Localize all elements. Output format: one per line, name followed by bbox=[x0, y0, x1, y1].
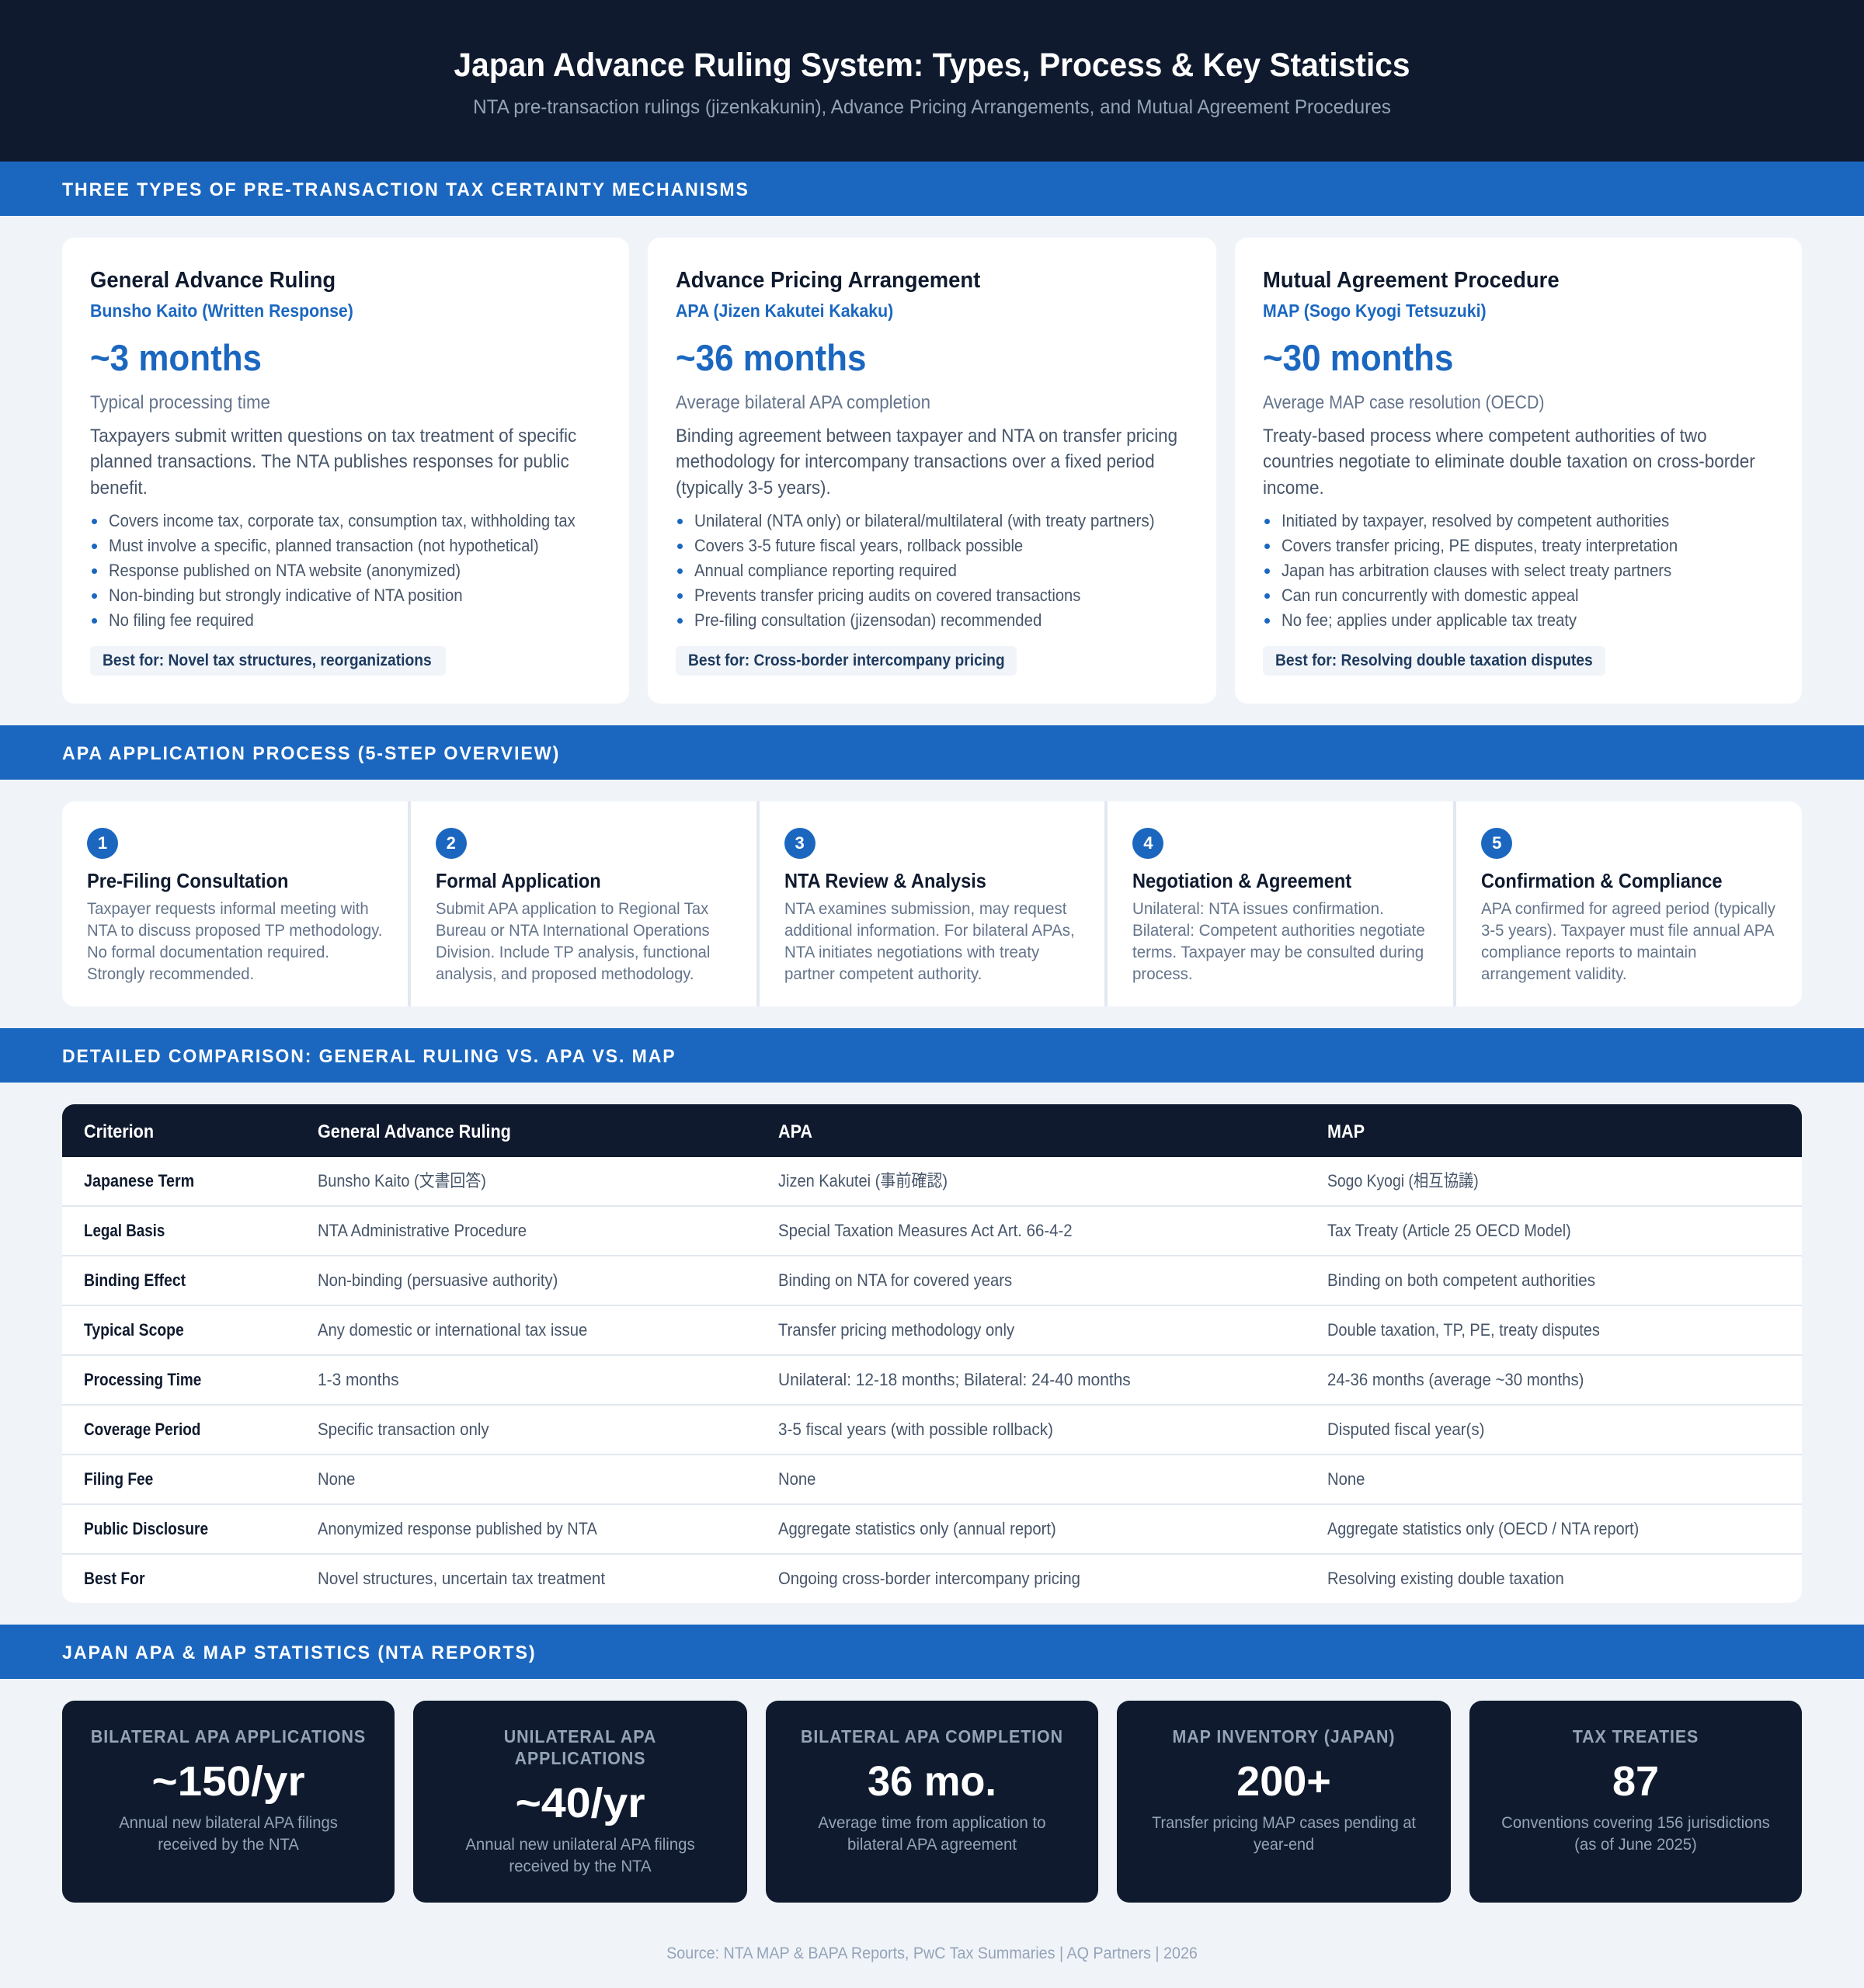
stat note: year-end bbox=[1254, 1835, 1314, 1854]
step description: additional information. For bilateral APAs, bbox=[784, 921, 1074, 940]
stat note bbox=[465, 1835, 695, 1875]
description: (typically 3-5 years). bbox=[676, 478, 831, 499]
section heading: statistics bbox=[0, 1625, 1864, 1679]
row: public disclosure: Aggregate statistics only (OECD / NTA report) bbox=[1327, 1519, 1639, 1538]
stat value: 87 bbox=[1612, 1758, 1659, 1805]
row: filing fee: None bbox=[778, 1469, 816, 1489]
row: processing time: Processing Time bbox=[84, 1370, 201, 1389]
row: legal basis: Tax Treaty (Article 25 OECD Model) bbox=[1327, 1221, 1571, 1240]
step number: 5 bbox=[1492, 833, 1501, 853]
bullet list: Covers 3-5 future fiscal years, rollback possible bbox=[694, 536, 1023, 555]
step description: APA confirmed for agreed period (typically bbox=[1481, 899, 1775, 918]
row: legal basis: Legal Basis bbox=[84, 1221, 165, 1240]
row: coverage period: Disputed fiscal year(s) bbox=[1327, 1420, 1484, 1439]
row: binding effect: Non-binding (persuasive authority) bbox=[318, 1270, 558, 1290]
stat value: 200+ bbox=[1236, 1758, 1331, 1805]
bullet list: No filing fee required bbox=[109, 610, 254, 630]
stat card: tax treaties bbox=[1469, 1701, 1802, 1903]
row: filing fee bbox=[62, 1455, 1802, 1505]
stat note: Annual new bilateral APA filings bbox=[119, 1813, 338, 1832]
bullet list: Initiated by taxpayer, resolved by competent authorities bbox=[1282, 511, 1669, 530]
row: legal basis bbox=[62, 1207, 1802, 1256]
row: processing time: 24-36 months (average ~30 months) bbox=[1327, 1370, 1584, 1389]
description: income. bbox=[1263, 478, 1324, 499]
step 1 bbox=[62, 801, 408, 1006]
comparison table bbox=[62, 1104, 1802, 1603]
card subtitle: MAP (Sogo Kyogi Tetsuzuki) bbox=[1263, 301, 1487, 321]
best-for tag: Best for: Novel tax structures, reorganizations bbox=[103, 652, 432, 669]
row: typical scope: Transfer pricing methodology only bbox=[778, 1320, 1014, 1340]
step number bbox=[436, 828, 467, 859]
section heading: statistics: JAPAN APA & MAP STATISTICS (NTA REPORTS) bbox=[62, 1642, 537, 1663]
step title: Confirmation & Compliance bbox=[1481, 869, 1723, 892]
stat card: bilateral applications bbox=[62, 1701, 395, 1903]
row: typical scope: Double taxation, TP, PE, treaty disputes bbox=[1327, 1320, 1600, 1340]
step description: Strongly recommended. bbox=[87, 964, 254, 983]
step description: Division. Include TP analysis, functional bbox=[436, 943, 710, 961]
step description: Bureau or NTA International Operations bbox=[436, 921, 709, 940]
row: coverage period: Coverage Period bbox=[84, 1420, 200, 1439]
panel: advance pricing arrangement bbox=[648, 238, 1216, 704]
bullet list bbox=[677, 511, 1155, 630]
step 2 bbox=[411, 801, 756, 1006]
bullet list: Covers income tax, corporate tax, consumption tax, withholding tax bbox=[109, 511, 576, 530]
stat label: APPLICATIONS bbox=[515, 1748, 645, 1768]
row: public disclosure: Aggregate statistics only (annual report) bbox=[778, 1519, 1055, 1538]
row: processing time bbox=[62, 1356, 1802, 1406]
table header: General Advance Ruling bbox=[318, 1121, 511, 1142]
bullet list: Unilateral (NTA only) or bilateral/multilateral (with treaty partners) bbox=[694, 511, 1155, 530]
step number: 4 bbox=[1143, 833, 1153, 853]
step title: Pre-Filing Consultation bbox=[87, 869, 288, 892]
step description bbox=[1132, 899, 1425, 983]
step number: 2 bbox=[447, 833, 456, 853]
stat card: unilateral applications bbox=[413, 1701, 747, 1903]
row: filing fee: None bbox=[1327, 1469, 1365, 1489]
description: Taxpayers submit written questions on tax treatment of specific bbox=[90, 426, 576, 446]
step description: process. bbox=[1132, 964, 1193, 983]
row: filing fee: None bbox=[318, 1469, 355, 1489]
step number bbox=[1481, 828, 1512, 859]
stat note: Conventions covering 156 jurisdictions bbox=[1501, 1813, 1770, 1832]
step description bbox=[1481, 899, 1775, 983]
bullet list: No fee; applies under applicable tax treaty bbox=[1282, 610, 1577, 630]
row: best for: Ongoing cross-border intercompany pricing bbox=[778, 1569, 1080, 1588]
figure caption: Average bilateral APA completion bbox=[676, 392, 930, 413]
description bbox=[676, 426, 1177, 499]
stat value: ~40/yr bbox=[515, 1780, 645, 1826]
step description: NTA initiates negotiations with treaty bbox=[784, 943, 1039, 961]
step description: Unilateral: NTA issues confirmation. bbox=[1132, 899, 1384, 918]
row: processing time: 1-3 months bbox=[318, 1370, 399, 1389]
best-for tag: Best for: Resolving double taxation disputes bbox=[1275, 652, 1593, 669]
stat label: MAP INVENTORY (JAPAN) bbox=[1173, 1726, 1395, 1746]
step title: Negotiation & Agreement bbox=[1132, 869, 1352, 892]
card title: General Advance Ruling bbox=[90, 268, 336, 293]
step 3 bbox=[760, 801, 1104, 1006]
stat label: BILATERAL APA COMPLETION bbox=[801, 1726, 1063, 1746]
panel: five-step process bbox=[62, 801, 1802, 1006]
table header: Criterion bbox=[84, 1121, 154, 1142]
row: typical scope: Typical Scope bbox=[84, 1320, 184, 1340]
description bbox=[90, 426, 576, 499]
row: typical scope bbox=[62, 1306, 1802, 1356]
row: public disclosure bbox=[62, 1505, 1802, 1555]
row: coverage period: 3-5 fiscal years (with possible rollback) bbox=[778, 1420, 1052, 1439]
stat note bbox=[818, 1813, 1046, 1854]
step number: 3 bbox=[795, 833, 805, 853]
step 4 bbox=[1108, 801, 1453, 1006]
step number: 1 bbox=[98, 833, 107, 853]
step number bbox=[87, 828, 118, 859]
step title: Formal Application bbox=[436, 869, 600, 892]
table header: APA bbox=[778, 1121, 812, 1142]
stat note: received by the NTA bbox=[509, 1857, 652, 1875]
section heading: process bbox=[0, 725, 1864, 780]
row: processing time: Unilateral: 12-18 months; Bilateral: 24-40 months bbox=[778, 1370, 1130, 1389]
section heading: three types bbox=[0, 162, 1864, 216]
bullet list: Covers transfer pricing, PE disputes, treaty interpretation bbox=[1282, 536, 1678, 555]
step number bbox=[784, 828, 816, 859]
step description: NTA to discuss proposed TP methodology. bbox=[87, 921, 382, 940]
title: Japan Advance Ruling System: Types, Process & Key Statistics bbox=[454, 47, 1410, 84]
header band bbox=[0, 0, 1864, 162]
row: binding effect: Binding on both competent authorities bbox=[1327, 1270, 1595, 1290]
row: best for: Novel structures, uncertain tax treatment bbox=[318, 1569, 605, 1588]
step description: partner competent authority. bbox=[784, 964, 982, 983]
row: japanese term: Sogo Kyogi (相互協議) bbox=[1327, 1171, 1479, 1190]
bullet list: Non-binding but strongly indicative of NTA position bbox=[109, 586, 463, 605]
panel: general advance ruling bbox=[62, 238, 629, 704]
bullet list: Annual compliance reporting required bbox=[694, 561, 957, 580]
stat label: BILATERAL APA APPLICATIONS bbox=[91, 1726, 366, 1746]
row: legal basis: NTA Administrative Procedure bbox=[318, 1221, 527, 1240]
row: legal basis: Special Taxation Measures Act Art. 66-4-2 bbox=[778, 1221, 1072, 1240]
table header: MAP bbox=[1327, 1121, 1365, 1142]
table header bbox=[62, 1104, 1802, 1157]
key figure: ~36 months bbox=[676, 337, 866, 378]
section heading: three types: THREE TYPES OF PRE-TRANSACTION TAX CERTAINTY MECHANISMS bbox=[62, 179, 749, 200]
stat label: UNILATERAL APA bbox=[504, 1726, 656, 1746]
key figure: ~3 months bbox=[90, 337, 262, 378]
figure caption: Typical processing time bbox=[90, 392, 270, 413]
bullet list bbox=[92, 511, 576, 630]
best-for tag bbox=[90, 646, 446, 676]
description bbox=[1263, 426, 1755, 499]
step title: NTA Review & Analysis bbox=[784, 869, 986, 892]
stat note bbox=[1501, 1813, 1770, 1854]
stat value: 36 mo. bbox=[868, 1758, 996, 1805]
step description: terms. Taxpayer may be consulted during bbox=[1132, 943, 1424, 961]
stat note: bilateral APA agreement bbox=[847, 1835, 1017, 1854]
step description: analysis, and proposed methodology. bbox=[436, 964, 694, 983]
bullet list: Can run concurrently with domestic appeal bbox=[1282, 586, 1579, 605]
subtitle: NTA pre-transaction rulings (jizenkakunin), Advance Pricing Arrangements, and Mutual Agreement Procedures bbox=[473, 96, 1391, 118]
description: planned transactions. The NTA publishes responses for public bbox=[90, 451, 569, 472]
stat note: Transfer pricing MAP cases pending at bbox=[1152, 1813, 1416, 1832]
row: public disclosure: Public Disclosure bbox=[84, 1519, 208, 1538]
row: binding effect bbox=[62, 1256, 1802, 1306]
row: best for: Resolving existing double taxation bbox=[1327, 1569, 1564, 1588]
row: best for: Best For bbox=[84, 1569, 145, 1588]
step description: Taxpayer requests informal meeting with bbox=[87, 899, 369, 918]
row: japanese term: Jizen Kakutei (事前確認) bbox=[778, 1171, 948, 1190]
description: Treaty-based process where competent authorities of two bbox=[1263, 426, 1707, 446]
row: binding effect: Binding Effect bbox=[84, 1270, 186, 1290]
stat label: TAX TREATIES bbox=[1573, 1726, 1699, 1746]
row: binding effect: Binding on NTA for covered years bbox=[778, 1270, 1012, 1290]
stat note: (as of June 2025) bbox=[1574, 1835, 1697, 1854]
bullet list: Pre-filing consultation (jizensodan) recommended bbox=[694, 610, 1042, 630]
description: methodology for intercompany transactions over a fixed period bbox=[676, 451, 1155, 472]
bullet list: Response published on NTA website (anonymized) bbox=[109, 561, 461, 580]
step description: Bilateral: Competent authorities negotiate bbox=[1132, 921, 1425, 940]
step description bbox=[87, 899, 382, 983]
row: typical scope: Any domestic or international tax issue bbox=[318, 1320, 587, 1340]
row: best for bbox=[84, 1569, 1564, 1588]
best-for tag: Best for: Cross-border intercompany pricing bbox=[688, 652, 1005, 669]
stat note: Annual new unilateral APA filings bbox=[465, 1835, 695, 1854]
description: countries negotiate to eliminate double taxation on cross-border bbox=[1263, 451, 1755, 472]
bullet list: Must involve a specific, planned transaction (not hypothetical) bbox=[109, 536, 539, 555]
stat note bbox=[119, 1813, 338, 1854]
stat note: received by the NTA bbox=[158, 1835, 299, 1854]
row: coverage period bbox=[62, 1406, 1802, 1455]
stat card: MAP inventory bbox=[1117, 1701, 1451, 1903]
row: japanese term: Japanese Term bbox=[84, 1171, 194, 1190]
card title: Advance Pricing Arrangement bbox=[676, 268, 980, 293]
description: Binding agreement between taxpayer and NTA on transfer pricing bbox=[676, 426, 1177, 446]
best-for tag bbox=[676, 646, 1017, 676]
step description: arrangement validity. bbox=[1481, 964, 1627, 983]
row: filing fee: Filing Fee bbox=[84, 1469, 153, 1489]
stat note: Average time from application to bbox=[818, 1813, 1046, 1832]
row: japanese term bbox=[62, 1157, 1802, 1207]
stat label bbox=[504, 1726, 656, 1768]
stat card: bilateral completion bbox=[766, 1701, 1098, 1903]
row: japanese term: Bunsho Kaito (文書回答) bbox=[318, 1171, 486, 1190]
step 5 bbox=[1456, 801, 1802, 1006]
bullet list bbox=[1264, 511, 1678, 630]
section heading: comparison bbox=[0, 1028, 1864, 1083]
step description: NTA examines submission, may request bbox=[784, 899, 1066, 918]
description: benefit. bbox=[90, 478, 148, 499]
card subtitle: APA (Jizen Kakutei Kakaku) bbox=[676, 301, 893, 321]
section heading: process: APA APPLICATION PROCESS (5-STEP OVERVIEW) bbox=[62, 743, 560, 764]
stat value: ~150/yr bbox=[151, 1758, 305, 1805]
source footer: Source: NTA MAP & BAPA Reports, PwC Tax Summaries | AQ Partners | 2026 bbox=[666, 1944, 1198, 1962]
step description: No formal documentation required. bbox=[87, 943, 329, 961]
step description bbox=[436, 899, 710, 983]
section heading: comparison: DETAILED COMPARISON: GENERAL RULING VS. APA VS. MAP bbox=[62, 1046, 676, 1067]
card title: Mutual Agreement Procedure bbox=[1263, 268, 1560, 293]
step number bbox=[1132, 828, 1163, 859]
row: public disclosure: Anonymized response published by NTA bbox=[318, 1519, 597, 1538]
figure caption: Average MAP case resolution (OECD) bbox=[1263, 392, 1544, 413]
bullet list: Japan has arbitration clauses with select treaty partners bbox=[1282, 561, 1671, 580]
key figure: ~30 months bbox=[1263, 337, 1453, 378]
bullet list: Prevents transfer pricing audits on covered transactions bbox=[694, 586, 1080, 605]
best-for tag bbox=[1263, 646, 1605, 676]
step description bbox=[784, 899, 1074, 983]
row: coverage period: Specific transaction only bbox=[318, 1420, 489, 1439]
step description: Submit APA application to Regional Tax bbox=[436, 899, 708, 918]
panel: mutual agreement procedure bbox=[1235, 238, 1802, 704]
step description: 3-5 years). Taxpayer must file annual APA bbox=[1481, 921, 1775, 940]
stat note bbox=[1152, 1813, 1416, 1854]
step description: compliance reports to maintain bbox=[1481, 943, 1697, 961]
card subtitle: Bunsho Kaito (Written Response) bbox=[90, 301, 353, 321]
